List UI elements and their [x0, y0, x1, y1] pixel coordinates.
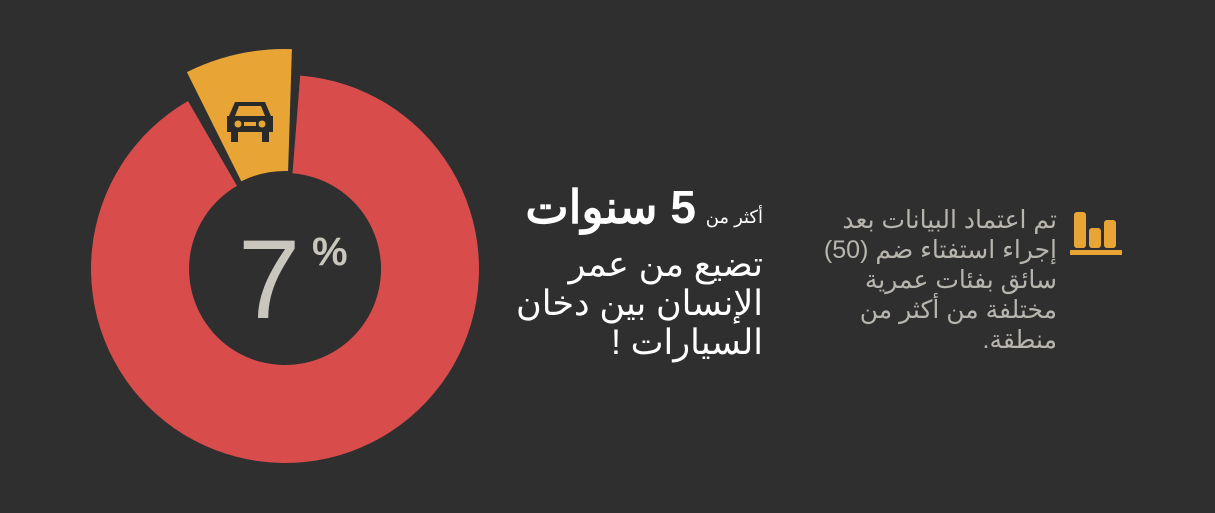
headline text block: تضيع من عمر — [568, 245, 763, 284]
headline text block: أكثر من 5 سنوات — [525, 181, 763, 233]
red segment 93% — [91, 76, 479, 463]
icon: car — [227, 102, 273, 142]
percentage value: % — [312, 230, 348, 274]
headline text block — [516, 181, 763, 362]
methodology note: إجراء استفتاء ضم (50) — [824, 236, 1057, 264]
methodology note: تم اعتماد البيانات بعد — [842, 206, 1057, 234]
headline text block: السيارات ! — [611, 323, 763, 362]
icon: bar chart — [1070, 212, 1122, 255]
orange segment 7% — [187, 49, 292, 181]
methodology note: منطقة. — [983, 326, 1057, 354]
percentage value: 7 — [238, 217, 300, 342]
methodology note — [824, 206, 1057, 354]
headline text block: الإنسان بين دخان — [516, 284, 763, 323]
methodology note: سائق بفئات عمرية — [865, 266, 1057, 294]
methodology note: مختلفة من أكثر من — [860, 296, 1057, 324]
percentage value — [238, 217, 348, 342]
